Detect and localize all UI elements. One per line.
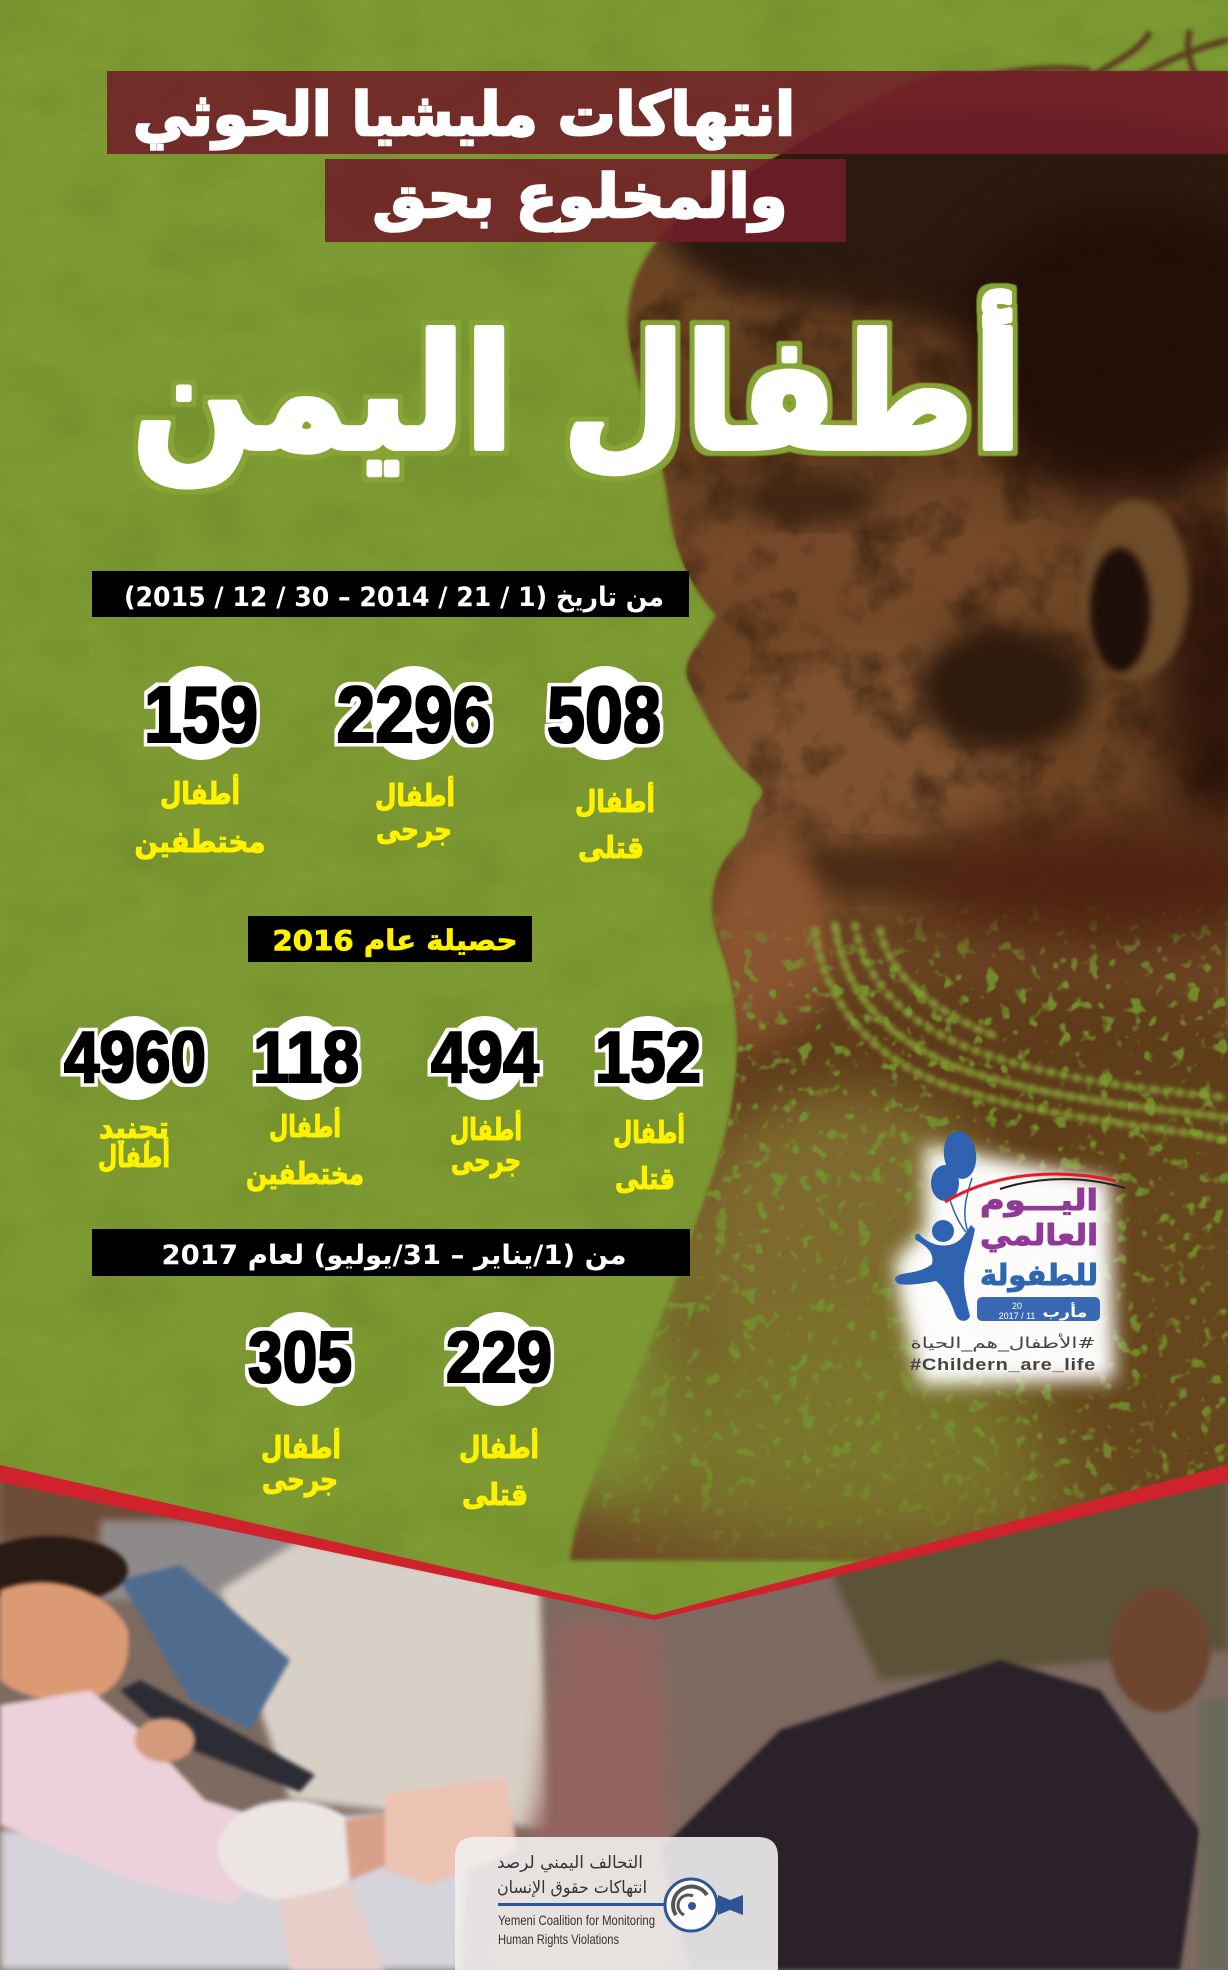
- hair mass: [654, 142, 1228, 336]
- hair strands above the banner: [960, 30, 1228, 85]
- dress right: [988, 1154, 1228, 1512]
- blue pillow: [120, 1565, 290, 1730]
- bandaged leg: [385, 1778, 518, 1885]
- chest dress: [730, 986, 1228, 1158]
- stat: 2296 wounded: أطفال: [375, 776, 455, 814]
- stat: 4960 child recruits: [64, 1016, 206, 1175]
- main title: أطفال اليمن: [132, 291, 1022, 487]
- heading bar line two: [325, 159, 846, 242]
- diaper: [218, 1800, 362, 1900]
- stat: 508 killed: قتلى: [578, 831, 644, 866]
- date bar 2016: [248, 916, 532, 962]
- shoulder: [710, 840, 830, 1060]
- wall upper left: [0, 1465, 237, 1542]
- date bar 2016: حصيلة عام 2016: [272, 924, 518, 957]
- stat: 2296 wounded: 2296: [336, 670, 492, 759]
- stat: 508 killed: [547, 666, 661, 866]
- stat: 4960 child recruits: 4960: [64, 1018, 206, 1098]
- baby hair: [0, 1536, 128, 1604]
- arm: [135, 1718, 195, 1762]
- stat: 229 killed: 229: [446, 1318, 552, 1398]
- stat: 229 killed: قتلى: [462, 1478, 528, 1513]
- stat: 4960 child recruits: أطفال: [98, 1137, 170, 1175]
- red tinted centre: [480, 1620, 680, 1970]
- stat: 118 abducted: [246, 1016, 364, 1192]
- ear rim: [1081, 500, 1189, 680]
- photo: burned child portrait: [568, 27, 1228, 1563]
- photo: wounded baby and boy: [0, 1440, 1228, 1970]
- icon: child figure: [895, 1220, 975, 1321]
- logo date badge: مأرب: [1042, 1302, 1088, 1321]
- heading bar line one: [107, 71, 1228, 154]
- stat: 152 killed: قتلى: [615, 1162, 675, 1197]
- stat: 159 abducted: مختطفين: [134, 825, 266, 860]
- heading bar line one: انتهاكات مليشيا الحوثي: [133, 80, 795, 150]
- panel: coalition logo card: [455, 1837, 778, 1970]
- stat: 2296 wounded: [336, 666, 492, 848]
- bottom sheet: [0, 1810, 470, 1970]
- cheek light: [706, 644, 1015, 846]
- neck: [900, 820, 1228, 940]
- logo text: day: اليـــوم: [980, 1183, 1098, 1217]
- necklace pattern: [815, 925, 1228, 1140]
- coalition name english: [498, 1912, 655, 1947]
- stat: 508 killed: أطفال: [575, 782, 655, 820]
- stat: 118 abducted: أطفال: [269, 1107, 341, 1145]
- logo text: childhood: للطفولة: [980, 1258, 1098, 1292]
- stat: 305 wounded: جرحى: [262, 1463, 338, 1498]
- lower bandage: [280, 1885, 385, 1970]
- stat: 4960 child recruits: تجنيد: [99, 1111, 169, 1146]
- logo date badge: 2017 / 11: [999, 1311, 1035, 1321]
- jaw burn: [775, 844, 965, 896]
- coalition name arabic: [497, 1853, 647, 1898]
- red chevron stripe: [0, 1465, 1228, 1620]
- baby head: [0, 1582, 129, 1701]
- dress mid: [678, 1070, 1004, 1358]
- stat: 305 wounded: [248, 1312, 352, 1498]
- stat: 305 wounded: أطفال: [261, 1428, 341, 1466]
- stat: 118 abducted: 118: [253, 1018, 359, 1098]
- date bar 2014-2015: من تاريخ (1 / 21 / 2014 – 30 / 12 / 2015): [124, 582, 664, 613]
- coalition name english: Human Rights Violations: [498, 1931, 619, 1947]
- dark hair at right: [950, 200, 1228, 500]
- hair by ear: [1155, 500, 1228, 840]
- coalition name arabic: انتهاكات حقوق الإنسان: [497, 1878, 647, 1898]
- forehead: [662, 289, 978, 488]
- hashtags: #الأطفال_هم_الحياة: [910, 1333, 1096, 1353]
- logo date badge: [977, 1297, 1100, 1321]
- stat: 159 abducted: [134, 666, 266, 860]
- stat: 494 wounded: 494: [431, 1018, 539, 1098]
- stat: 159 abducted: أطفال: [160, 774, 240, 812]
- tablet: [120, 1680, 315, 1792]
- logo text: world: العالمي: [980, 1218, 1098, 1252]
- thigh: [345, 1810, 400, 1880]
- boy face: [1110, 1588, 1210, 1712]
- logo date badge: 20: [1012, 1301, 1022, 1311]
- stat: 152 killed: [595, 1016, 701, 1197]
- baby dress: [0, 1690, 300, 1905]
- burn patch near eye: [740, 476, 880, 524]
- stat: 494 wounded: أطفال: [450, 1110, 522, 1148]
- stat: 305 wounded: 305: [248, 1318, 352, 1398]
- stat: 152 killed: 152: [595, 1018, 701, 1098]
- wall grey: [100, 1520, 300, 1600]
- flag arc: [945, 1174, 1116, 1202]
- stat: 118 abducted: مختطفين: [246, 1157, 364, 1192]
- boy jacket: [660, 1660, 1200, 1970]
- burn patch on cheek: [920, 628, 1090, 752]
- stat: 494 wounded: جرحى: [451, 1144, 521, 1179]
- icon: balloons: [931, 1129, 979, 1232]
- logo: International Children's Day: [895, 1129, 1125, 1385]
- coalition name arabic: التحالف اليمني لرصد: [497, 1853, 643, 1873]
- rule: [498, 1903, 668, 1906]
- stat: 2296 wounded: جرحى: [376, 813, 452, 848]
- stat: 229 killed: أطفال: [459, 1428, 539, 1466]
- stat: 494 wounded: [431, 1016, 539, 1179]
- date bar 2017: [92, 1229, 690, 1276]
- ground right: [1200, 1700, 1228, 1970]
- dress lower: [580, 1316, 1104, 1560]
- date bar 2017: من (1/يناير – 31/يوليو) لعام 2017: [161, 1240, 626, 1271]
- date bar 2014-2015: [92, 571, 689, 617]
- soft green fade at lower left of body: [540, 1240, 690, 1500]
- ear hollow: [1090, 548, 1150, 672]
- brow: [672, 484, 1008, 622]
- hashtags: #Childern_are_life: [910, 1355, 1096, 1374]
- dry grass: [830, 1470, 1228, 1680]
- stat: 152 killed: أطفال: [613, 1113, 685, 1151]
- icon: camera eye emblem: [665, 1879, 743, 1931]
- stat: 508 killed: 508: [547, 670, 661, 759]
- coalition name english: Yemeni Coalition for Monitoring: [498, 1912, 655, 1928]
- bed sheet: [220, 1540, 550, 1830]
- heading bar line two: والمخلوع بحق: [372, 162, 788, 232]
- stat: 229 killed: [446, 1312, 552, 1513]
- hashtags: [910, 1333, 1096, 1374]
- stat: 159 abducted: 159: [144, 670, 258, 759]
